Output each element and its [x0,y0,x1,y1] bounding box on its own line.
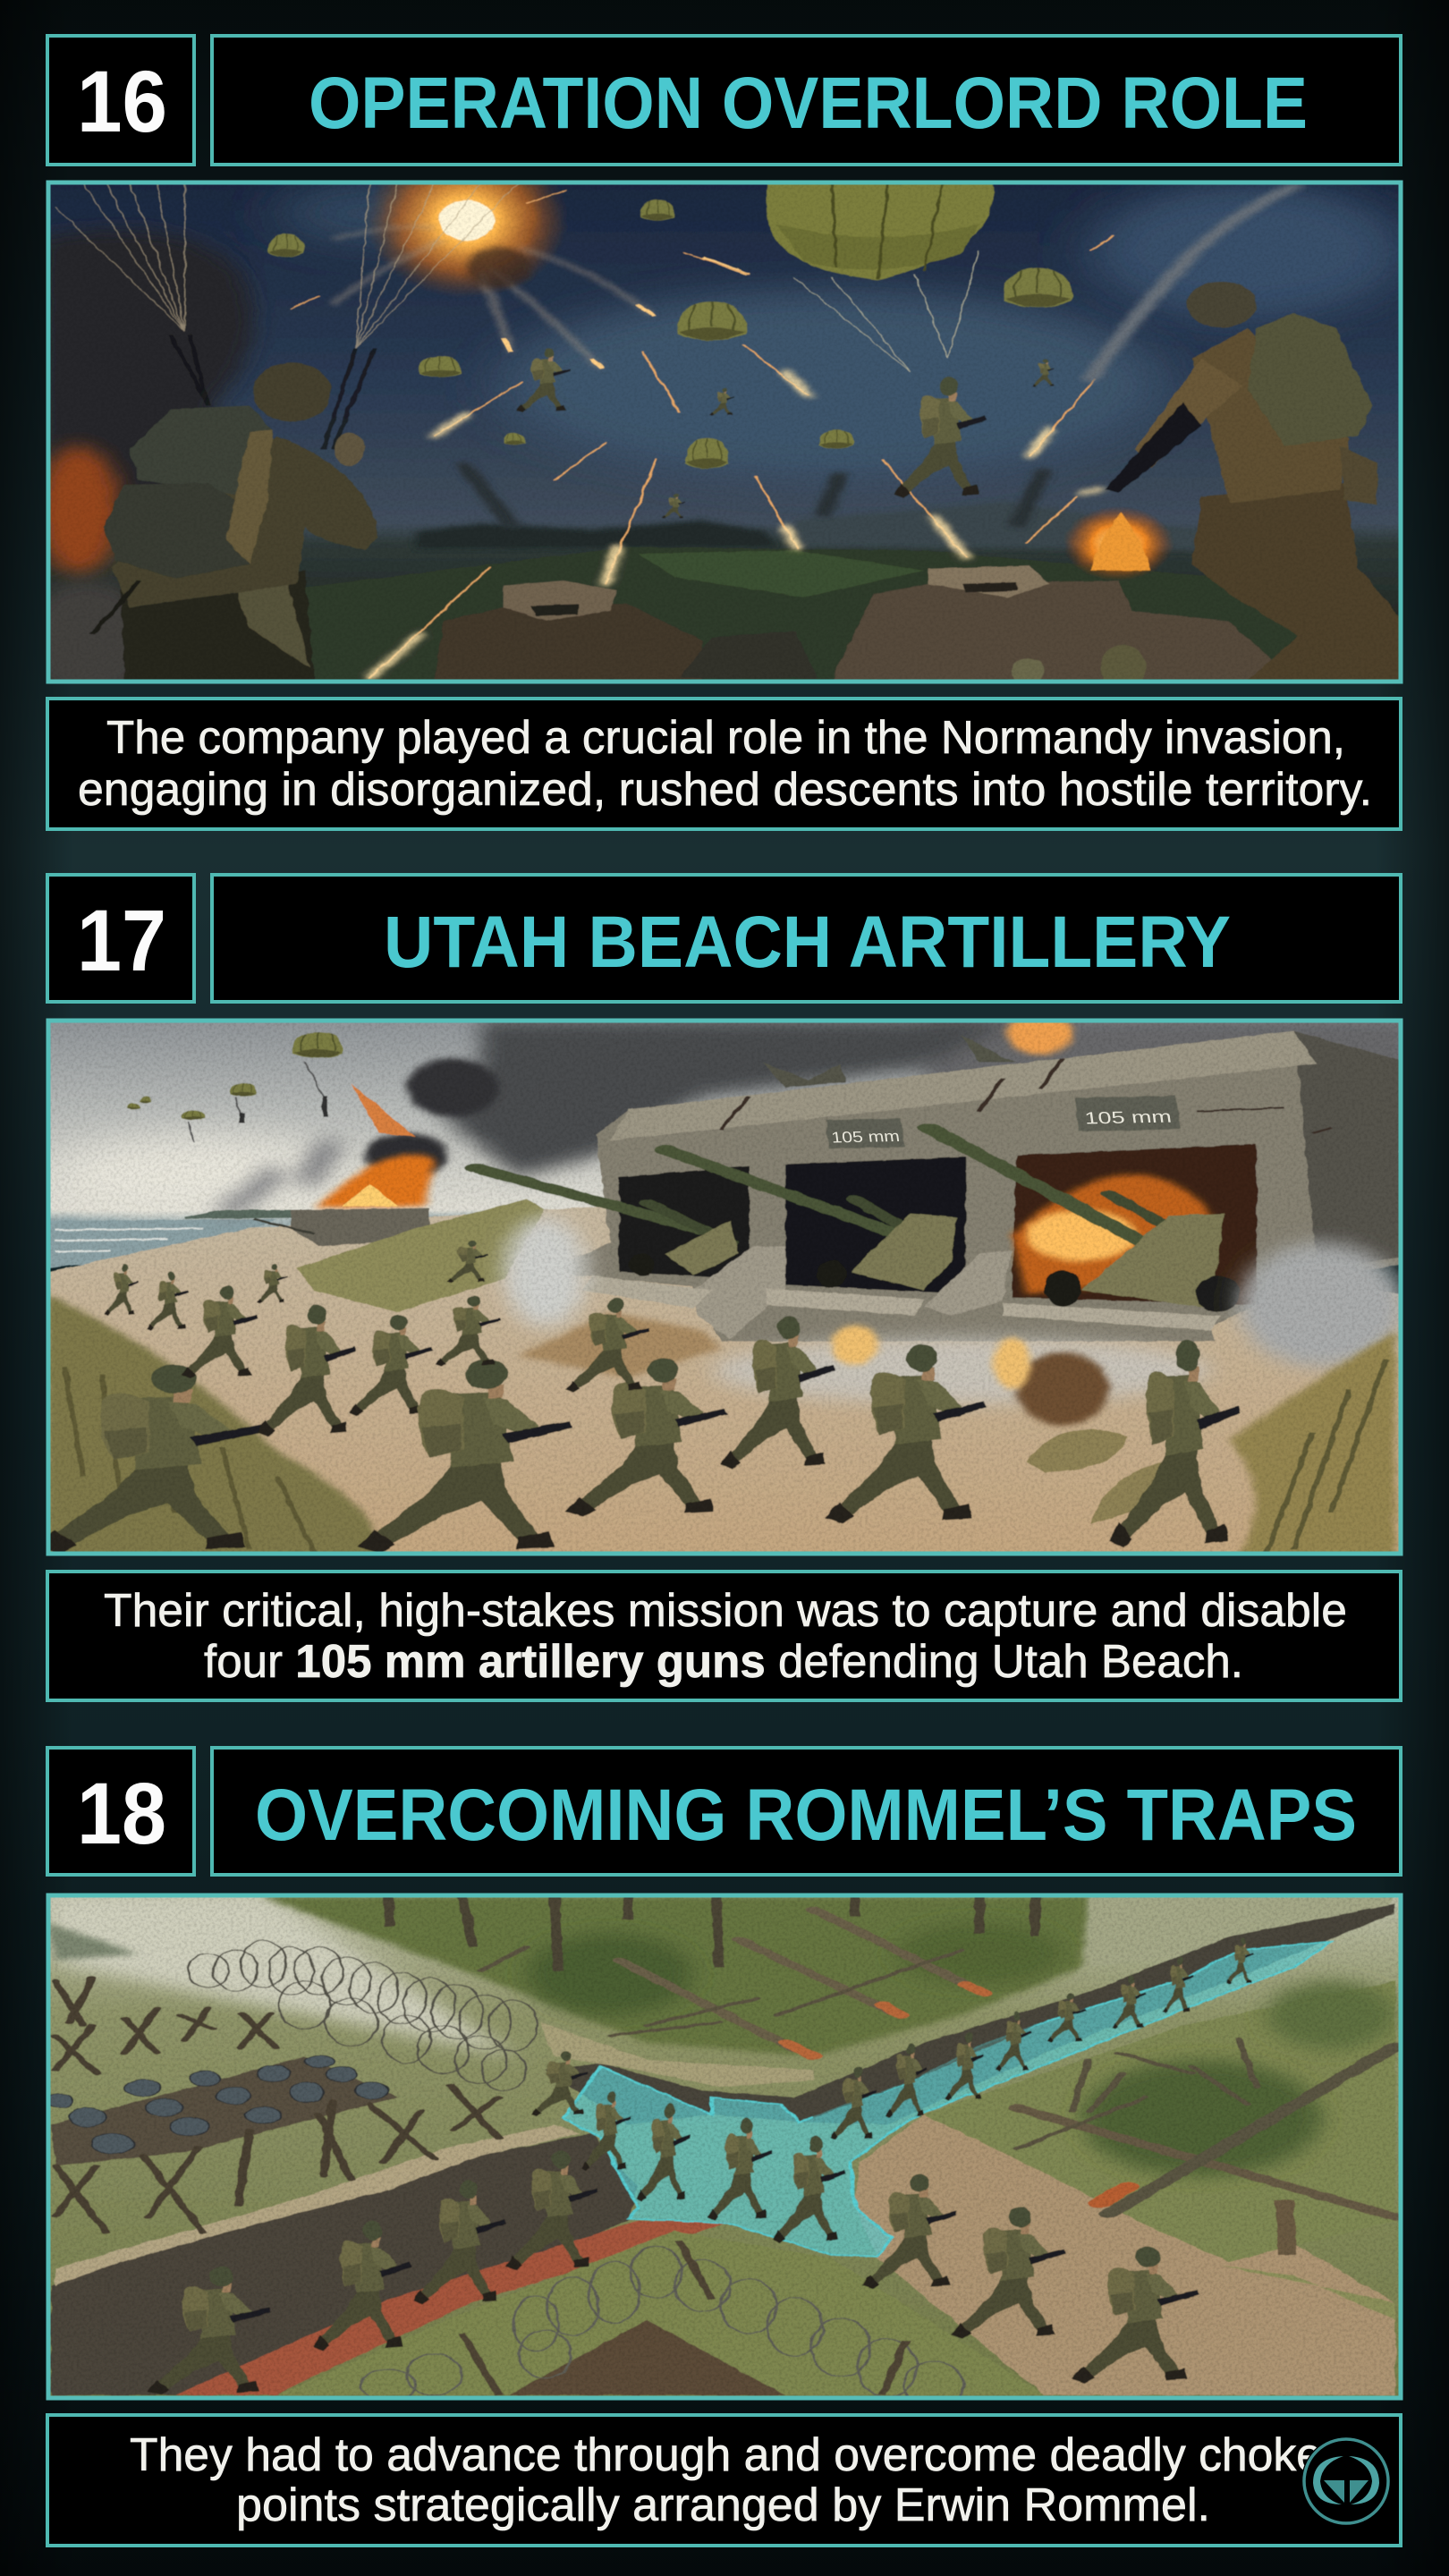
tracers [291,187,1293,678]
bunkers and mounds [435,565,1272,680]
dune grass far [296,1199,546,1312]
czech hedgehog obstacles [55,1978,499,2233]
barbed wire lower [360,2241,963,2409]
caption: points strategically arranged by Erwin Rommel. [236,2479,1210,2531]
explosion [327,184,751,370]
title: Operation Overlord Role [212,36,1401,165]
caption: engaging in disorganized, rushed descents into hostile territory. [78,764,1372,816]
image frame [48,1895,1401,2398]
airborne soldiers [517,348,1055,518]
label: 105 mm right: 105 mm [1083,1106,1173,1128]
distant haze and forest [47,1895,1395,2056]
beach sand [47,1207,1404,1556]
dust and smoke [504,1217,1404,1426]
mine field soil [51,2056,397,2165]
plateau edge sand [540,2022,813,2087]
land mines [47,2055,388,2154]
title: Overcoming Rommel's Traps: OVERCOMING ROMMEL’S TRAPS [255,1775,1357,1856]
caption: The company played a crucial role in the Normandy invasion, [106,712,1345,764]
concrete buttresses and shelves [582,1246,1220,1340]
illustration: night parachute drop over Normandy [50,184,1399,680]
caption [47,699,1401,829]
caption: four 105 mm artillery guns defending Utah Beach. [204,1636,1243,1688]
upper trench wall [546,1904,1395,2125]
illustration: soldiers storming 105 mm bunker: 105 mm [830,1127,901,1146]
number badge 16: 16 [77,53,167,150]
bottom centre wedge [277,2231,1045,2395]
painterly grain [37,1888,1414,2402]
paratrooper right foreground [1105,282,1400,680]
parachute risers left [55,183,518,449]
caption [47,1572,1401,1700]
dark shade on upper strip [804,1906,1395,2118]
fallen trees right [1017,2039,1395,2255]
smoke clouds left [23,229,1045,702]
concrete bunker [546,1031,1400,1342]
parachutes in sky [127,1032,343,1142]
cyan highlighted path [564,1942,1331,2257]
grass dunes [47,1294,1395,1556]
title: Utah Beach Artillery: UTAH BEACH ARTILLERY [384,902,1231,983]
howitzers [476,1128,1241,1312]
caption [47,2415,1401,2546]
illustration: soldiers storming 105 mm bunker [35,1011,1423,1561]
number badge 18: 18 [77,1765,166,1862]
soldiers in trench [148,1937,1253,2395]
caption: Their critical, high-stakes mission was to capture and disable [104,1585,1347,1637]
number badge 17: 17 [77,892,166,989]
panel: section 16 Operation Overlord role [23,36,1423,829]
red trench floor [175,2221,730,2395]
panel: section 18 Overcoming Rommel's traps [37,1748,1414,2546]
panel: section 17 Utah Beach artillery [35,875,1423,1700]
barbed wire upper [188,1940,537,2090]
painterly grain [37,1016,1423,1561]
burning far bunker [185,1084,435,1246]
icon: circular logo [1301,2436,1391,2526]
parachutes [268,183,1072,469]
dark smoke [222,1011,1414,1214]
night sky and ground [37,180,1423,685]
painterly grain [37,180,1423,685]
right bank [855,2084,1395,2395]
left trench wall [51,2133,638,2395]
burning fire [1063,506,1174,580]
caption: They had to advance through and overcome deadly choke [130,2429,1322,2481]
title: Operation Overlord Role: OPERATION OVERLORD ROLE [309,63,1308,144]
number badge 17 [47,875,194,1002]
paratrooper left foreground [92,362,379,680]
image frame [48,182,1401,682]
title: Overcoming Rommel's Traps [212,1748,1401,1875]
number badge 18 [47,1748,194,1875]
fallen trees upper [480,1909,984,2056]
terrain base [37,1888,1414,2402]
sky and sea [37,1016,1423,1268]
title: Utah Beach Artillery [212,875,1401,1002]
soldiers advancing [35,1241,1240,1553]
number badge 16 [47,36,194,165]
illustration: trench route through traps [37,1888,1414,2409]
gun embrasures [619,1144,1257,1305]
image frame [48,1021,1401,1554]
